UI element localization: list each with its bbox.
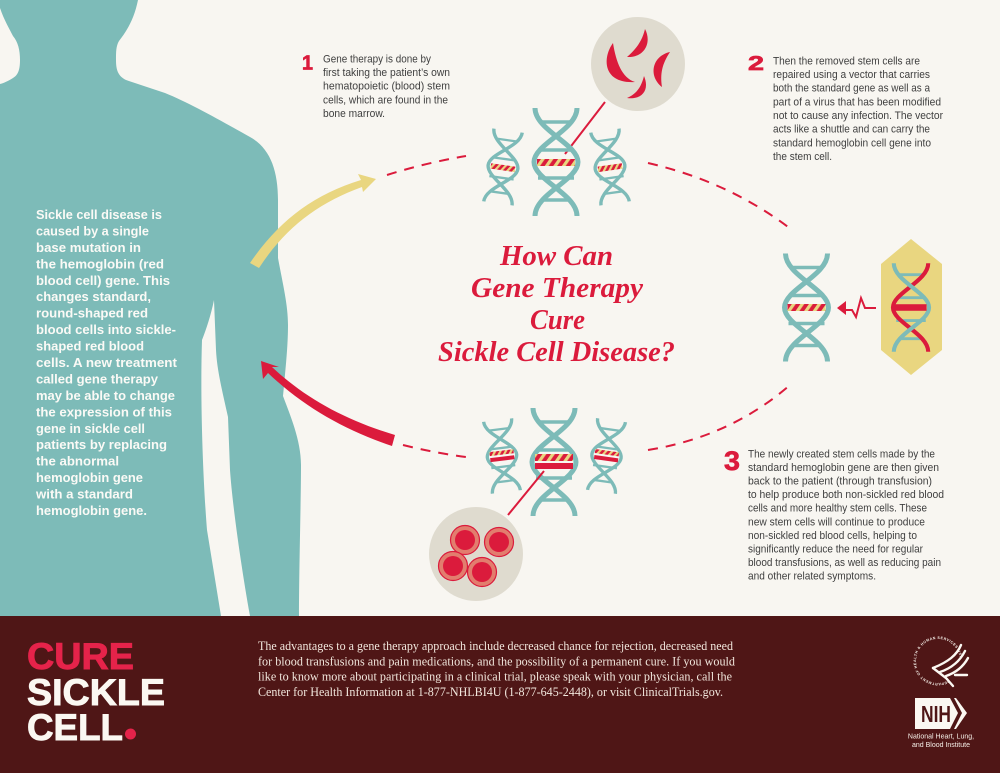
icon: healthy round cells circle	[429, 507, 523, 601]
step 2 text: Then the removed stem cells are	[773, 55, 920, 67]
text block: sickle cell disease explanation: round-shaped red	[36, 306, 148, 321]
logo: NIH: and Blood Institute	[912, 742, 970, 749]
step 2 text: acts like a shuttle and can carry the	[773, 124, 930, 136]
step 3 text: back to the patient (through transfusion)	[748, 476, 932, 488]
text block: sickle cell disease explanation: changes standard,	[36, 289, 151, 304]
step 3 text: The newly created stem cells made by the	[748, 448, 935, 460]
text block: sickle cell disease explanation: called gene therapy	[36, 371, 159, 386]
connector line: sickled cells to gene	[565, 102, 605, 154]
footer paragraph: like to know more about participating in a clinical trial, please speak with your physician, call the	[258, 670, 732, 684]
step 3 text: blood transfusions, as well as reducing pain	[748, 557, 941, 569]
step 3 text: new stem cells will continue to produce	[748, 516, 925, 528]
text block: sickle cell disease explanation: the abnormal	[36, 454, 119, 469]
text block: sickle cell disease explanation: the expression of this	[36, 404, 172, 419]
logo: Cure Sickle Cell: CELL	[27, 707, 123, 748]
step 1 text: hematopoietic (blood) stem	[323, 81, 450, 93]
step 3 text: non-sickled red blood cells, helping to	[748, 530, 917, 542]
footer paragraph: The advantages to a gene therapy approach include decreased chance for rejection, decreased need	[258, 639, 734, 653]
logo: NIH	[908, 698, 974, 749]
step 3 text: cells and more healthy stem cells. These	[748, 503, 927, 515]
dna: modified gene at step 2	[784, 254, 828, 362]
footer band	[0, 616, 1000, 773]
dna: bottom right	[587, 418, 626, 494]
dna: bottom centre	[532, 408, 576, 516]
dashed cycle ring	[387, 156, 792, 457]
step 1 text: first taking the patient’s own	[323, 67, 450, 79]
title: How Can	[499, 241, 613, 272]
step 3 text	[748, 448, 944, 583]
text block: sickle cell disease explanation: cells. A new treatment	[36, 355, 178, 370]
connector line: gene to healthy cells	[508, 471, 544, 515]
arrow: yellow, out of the body	[250, 174, 376, 268]
title	[438, 241, 675, 368]
step 1 number: 1	[302, 52, 313, 74]
logo: NIH: National Heart, Lung,	[908, 734, 974, 740]
logo: Cure Sickle Cell: CURE	[27, 636, 134, 677]
text block: sickle cell disease explanation: gene in sickle cell	[36, 421, 145, 436]
step 3 number: 3	[724, 446, 740, 476]
text block: sickle cell disease explanation: with a standard	[35, 487, 133, 502]
text block: sickle cell disease explanation: Sickle cell disease is	[36, 207, 162, 222]
step 1 text: bone marrow.	[323, 108, 385, 120]
step 2 text: part of a virus that has been modified	[773, 96, 941, 108]
step 3 text: significantly reduce the need for regular	[748, 544, 923, 556]
step 2 text	[773, 55, 943, 163]
logo: Cure Sickle Cell: SICKLE	[27, 672, 165, 713]
step 2 text: not to cause any infection. The vector	[773, 110, 943, 122]
footer paragraph: for blood transfusions and pain medications, and the possibility of a permanent cure. If you would	[258, 654, 736, 668]
dna: bottom left	[483, 418, 521, 494]
logo: Cure Sickle Cell	[27, 636, 165, 748]
title: Cure	[530, 305, 585, 336]
text block: sickle cell disease explanation: blood cell) gene. This	[36, 273, 170, 288]
step 2 text: the stem cell.	[773, 151, 832, 163]
icon: sickled cells circle	[591, 17, 685, 111]
logo: NIH: NIH	[921, 701, 951, 727]
body silhouette	[0, 0, 301, 616]
dna: top centre	[534, 108, 578, 216]
text block: sickle cell disease explanation: blood cells into sickle-	[36, 322, 176, 337]
title: Gene Therapy	[471, 273, 644, 304]
text block: sickle cell disease explanation: hemoglobin gene.	[36, 503, 147, 518]
step 2 text: standard hemoglobin cell gene into	[773, 137, 931, 149]
step 1 text: cells, which are found in the	[323, 94, 448, 106]
vector hexagon with dna	[881, 239, 942, 375]
step 2 text: both the standard gene as well as a	[773, 83, 930, 95]
title: Sickle Cell Disease?	[438, 337, 675, 368]
step 1 text	[323, 54, 450, 120]
text block: sickle cell disease explanation: may be able to change	[36, 388, 175, 403]
dna: top left	[483, 129, 523, 205]
text block: sickle cell disease explanation: shaped red blood	[36, 339, 144, 354]
text block: sickle cell disease explanation: caused by a single	[36, 223, 149, 238]
step 3 text: to help produce both non-sickled red blood	[748, 489, 944, 501]
step 1 text: Gene therapy is done by	[323, 54, 432, 66]
text block: sickle cell disease explanation: patients by replacing	[36, 437, 167, 452]
text block: sickle cell disease explanation: the hemoglobin (red	[36, 256, 164, 271]
step 2 text: repaired using a vector that carries	[773, 69, 931, 81]
text block: sickle cell disease explanation	[35, 207, 178, 518]
arrow: vector to stem cell	[837, 298, 876, 317]
step 3 text: standard hemoglobin gene are then given	[748, 462, 939, 474]
step 2 number: 2	[748, 53, 764, 75]
dna: top right	[590, 129, 630, 205]
text block: sickle cell disease explanation: base mutation in	[36, 240, 141, 255]
footer paragraph: Center for Health Information at 1-877-NHLBI4U (1-877-645-2448), or visit ClinicalTrials.gov.	[258, 685, 723, 699]
footer paragraph	[258, 639, 736, 699]
step 3 text: and other related symptoms.	[748, 571, 876, 583]
icon: HHS seal: DEPARTMENT OF HEALTH & HUMAN SERVICES USA	[914, 636, 962, 686]
text block: sickle cell disease explanation: hemoglobin gene	[36, 470, 143, 485]
arrow: red, back into the body	[261, 361, 395, 446]
